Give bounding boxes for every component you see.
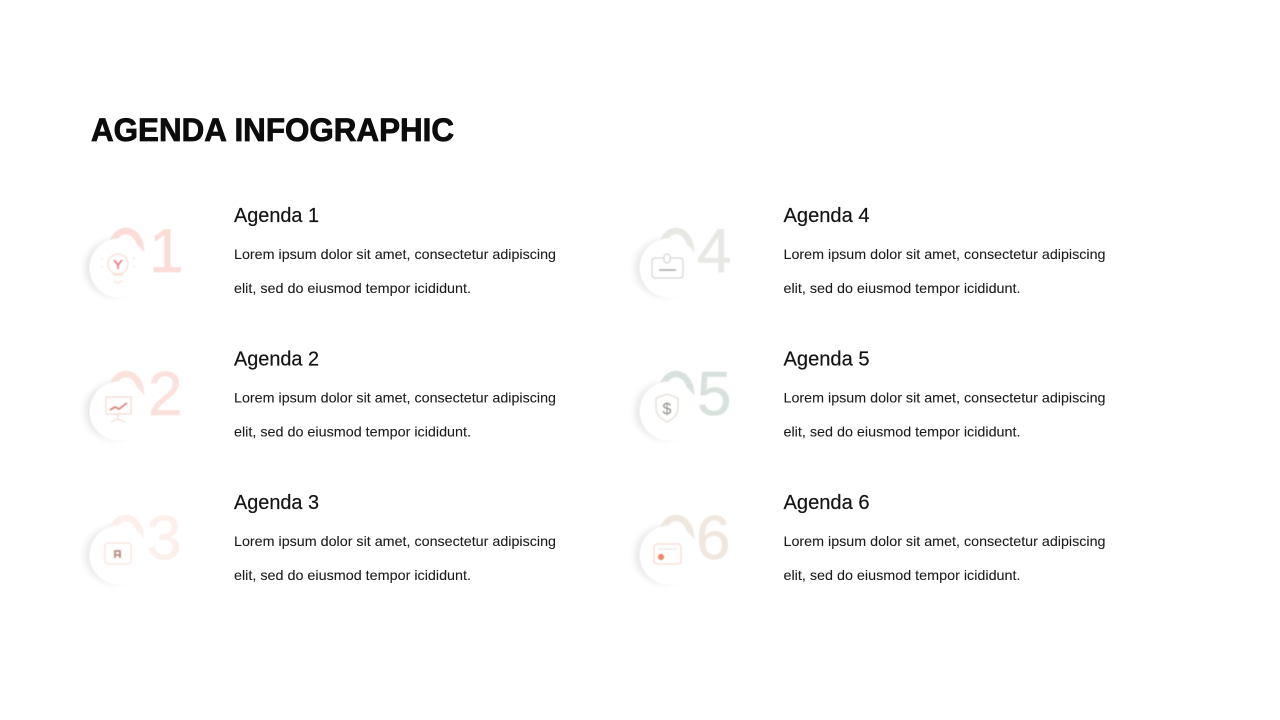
icon: light bulb [102,254,134,283]
description [234,390,556,440]
panel: agenda 2 [85,348,556,440]
number badge 06 [635,504,730,584]
description: elit, sed do eiusmod tempor icididunt. [234,567,471,583]
description: Lorem ipsum dolor sit amet, consectetur adipiscing [784,390,1106,406]
description: elit, sed do eiusmod tempor icididunt. [784,567,1020,583]
description: Lorem ipsum dolor sit amet, consectetur adipiscing [784,246,1106,262]
title: AGENDA INFOGRAPHIC [91,112,454,148]
number badge 01: 1 [149,217,183,286]
number badge 04: 4 [697,217,731,286]
panel: agenda 3 [85,492,556,584]
panel: agenda 4 [635,205,1106,298]
description [234,533,556,583]
icon: dollar shield [656,394,678,422]
icon: credit card [654,544,681,564]
number badge 05 [635,360,731,440]
number badge 03 [85,504,181,584]
number badge 04 [635,217,731,298]
description: elit, sed do eiusmod tempor icididunt. [784,280,1020,296]
heading: Agenda 6 [784,492,870,514]
heading: Agenda 2 [234,348,319,370]
description: Lorem ipsum dolor sit amet, consectetur adipiscing [784,533,1106,549]
description: elit, sed do eiusmod tempor icididunt. [234,280,471,296]
icon: dollar shield: $ [663,401,672,418]
heading: Agenda 4 [784,205,870,227]
description: elit, sed do eiusmod tempor icididunt. [234,424,471,440]
panel: agenda 5 [635,348,1106,440]
icon: presentation chart [106,397,131,422]
heading: Agenda 3 [234,492,319,514]
description [784,246,1106,296]
description [784,390,1106,440]
number badge 02: 2 [148,360,182,429]
description: elit, sed do eiusmod tempor icididunt. [784,424,1020,440]
number badge 06: 6 [696,504,730,573]
heading: Agenda 1 [234,205,319,227]
description [784,533,1106,583]
panel: agenda 1 [85,205,556,298]
number badge 01 [85,217,183,298]
description: Lorem ipsum dolor sit amet, consectetur adipiscing [234,533,556,549]
description: Lorem ipsum dolor sit amet, consectetur adipiscing [234,390,556,406]
number badge 05: 5 [697,360,731,429]
description [234,246,556,296]
number badge 03: 3 [147,504,181,573]
description: Lorem ipsum dolor sit amet, consectetur adipiscing [234,246,556,262]
icon: card slot [652,254,683,278]
heading: Agenda 5 [784,348,870,370]
panel: agenda 6 [635,492,1106,584]
number badge 02 [85,360,182,440]
icon: badge card [105,543,131,564]
